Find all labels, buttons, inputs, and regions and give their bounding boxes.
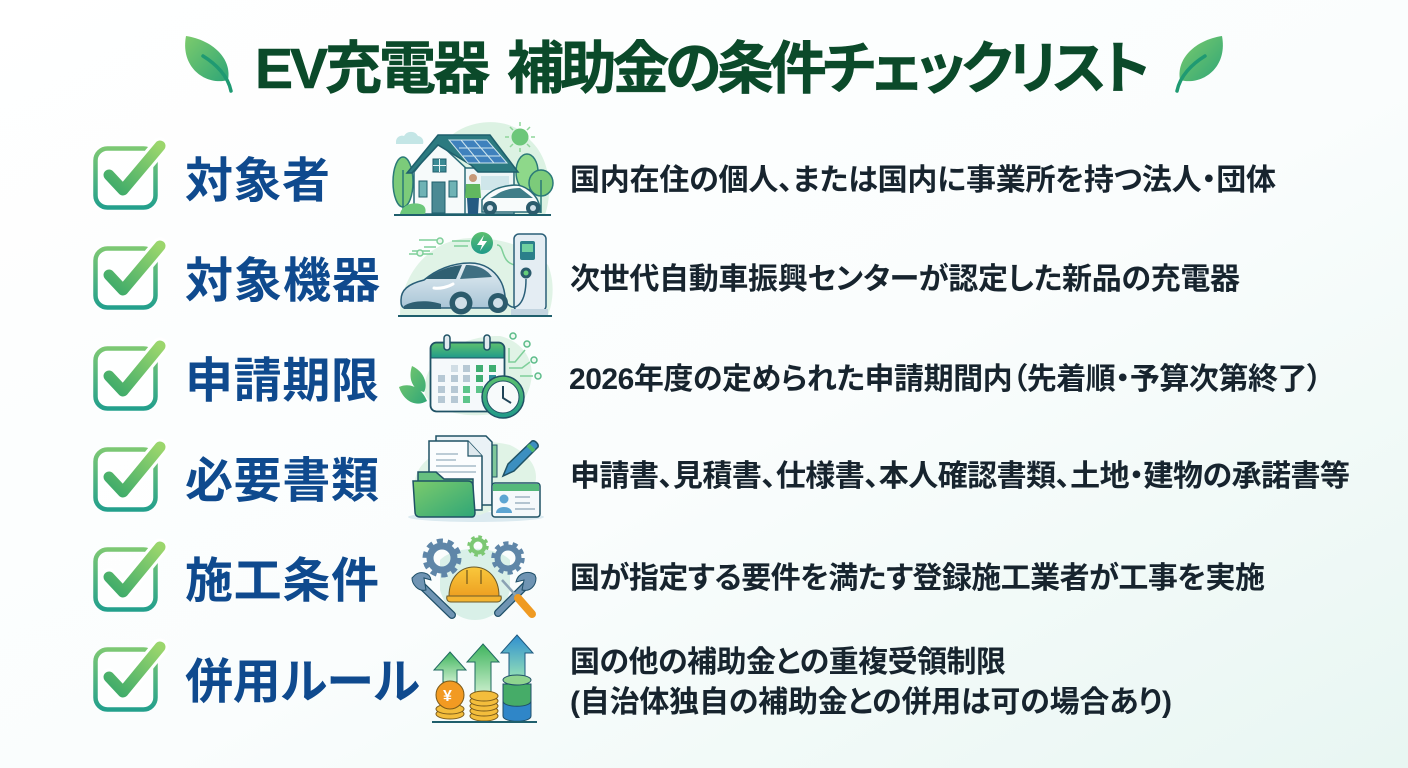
icon: coins and rising arrows: ¥ (443, 688, 452, 705)
icon: checkbox (96, 647, 160, 710)
row 1: target person (96, 122, 1276, 215)
row 3: application deadline (96, 333, 1322, 418)
icon: right leaf (1177, 36, 1223, 91)
row 4: required documents (96, 436, 1350, 522)
icon: hard hat, gears and tools (412, 537, 536, 620)
heading: 必要書類: 必要書類 (185, 455, 379, 508)
row 5: construction conditions (96, 537, 1265, 620)
description: 申請書、見積書、仕様書、本人確認書類、土地・建物の承諾書等 (570, 460, 1350, 493)
title: EV充電器 (255, 37, 490, 101)
description: 次世代自動車振興センターが認定した新品の充電器 (570, 262, 1240, 296)
description: 2026年度の定められた申請期間内（先着順・予算次第終了） (569, 363, 1322, 396)
icon: calendar and clock (399, 333, 541, 418)
description: 国が指定する要件を満たす登録施工業者が工事を実施 (570, 561, 1265, 595)
description: 国の他の補助金との重複受領制限 (570, 646, 1006, 679)
icon: house with solar panels and car (393, 122, 553, 215)
icon: checkbox (96, 246, 160, 308)
icon: checkbox (96, 547, 160, 610)
description (570, 646, 1172, 719)
heading: 対象者: 対象者 (185, 155, 330, 208)
heading: 併用ルール: 併用ルール (185, 656, 420, 709)
row 6: combined-use rule (96, 635, 1172, 722)
icon: coins and rising arrows (432, 635, 537, 722)
heading: 対象機器: 対象機器 (185, 255, 380, 308)
icon: left leaf (185, 36, 231, 91)
icon: EV at charging station (398, 232, 553, 316)
heading: 申請期限: 申請期限 (185, 355, 379, 408)
icon: checkbox (96, 346, 160, 408)
icon: checkbox (96, 146, 160, 208)
description: (自治体独自の補助金との併用は可の場合あり) (570, 686, 1172, 719)
icon: checkbox (96, 447, 160, 510)
icon: documents, folder, pen, ID card (408, 436, 544, 522)
description: 国内在住の個人、または国内に事業所を持つ法人・団体 (570, 164, 1276, 197)
title: 補助金の条件チェックリスト (507, 37, 1150, 101)
row 2: target equipment (96, 232, 1240, 316)
heading: 施工条件: 施工条件 (185, 555, 379, 608)
